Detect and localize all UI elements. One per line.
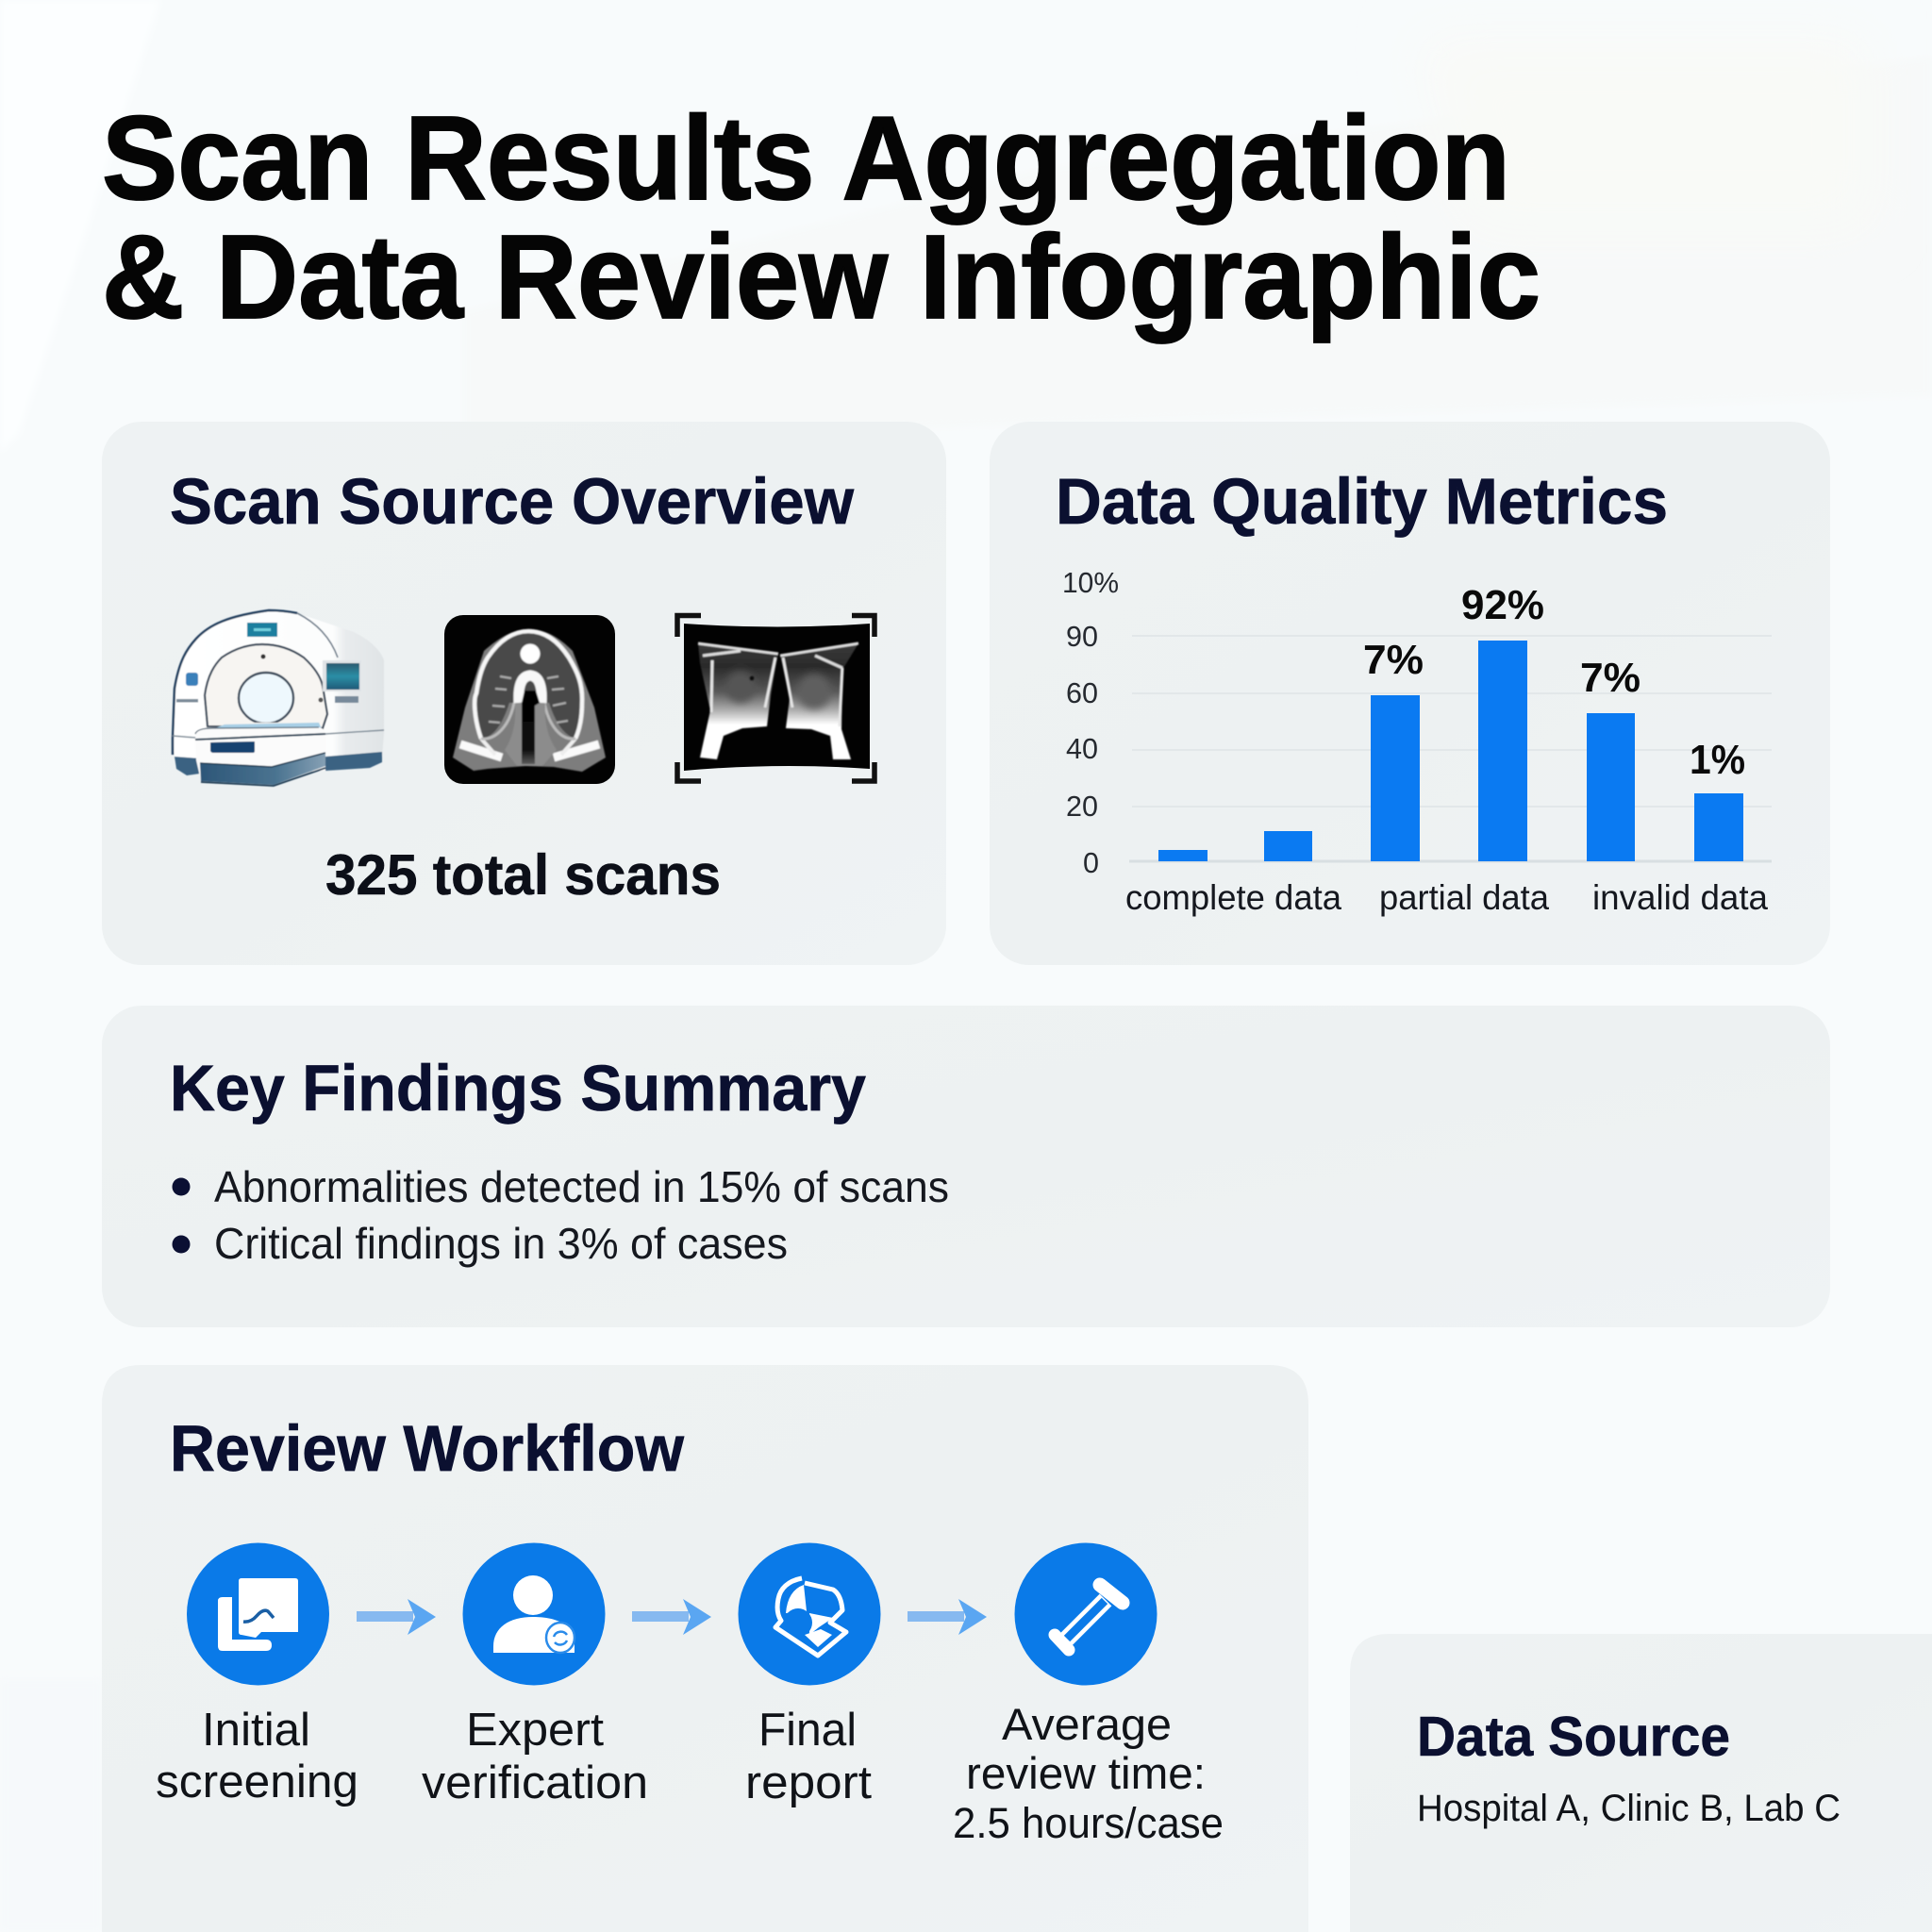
heading: scan source overview: Scan Source Overview xyxy=(170,465,854,538)
icon: CT scanner xyxy=(173,610,384,786)
label: final report: Final xyxy=(758,1705,857,1756)
bar chart: 40 xyxy=(1066,732,1098,765)
arrow 1 xyxy=(357,1599,436,1635)
label: average review time: 2.5 hours/case xyxy=(953,1799,1224,1847)
title xyxy=(102,92,1541,343)
label: expert verification: Expert xyxy=(466,1705,604,1756)
bar chart: 20 xyxy=(1066,790,1098,823)
label: initial screening xyxy=(156,1705,358,1807)
panel: data quality metrics xyxy=(990,422,1830,965)
label: final report xyxy=(745,1705,872,1808)
bar chart: 60 xyxy=(1066,676,1098,709)
bar chart: 7% xyxy=(1363,637,1424,683)
bar chart: 10% xyxy=(1062,566,1119,599)
bar chart: 0 xyxy=(1083,846,1099,879)
step: final report xyxy=(738,1543,881,1808)
step: initial screening xyxy=(156,1543,358,1807)
bar chart: 92% xyxy=(1461,582,1544,628)
bar chart xyxy=(1062,566,1772,917)
arrow 3 xyxy=(908,1599,987,1635)
arrow 2 xyxy=(632,1599,711,1635)
label: average review time: review time: xyxy=(966,1748,1206,1798)
label: average review time xyxy=(953,1699,1224,1847)
bar chart: 1% xyxy=(1690,737,1745,783)
panel: key findings summary xyxy=(102,1006,1830,1327)
panel: scan source overview xyxy=(102,422,946,965)
panel: review workflow xyxy=(102,1365,1308,1932)
label: final report: report xyxy=(745,1757,872,1808)
bar chart: partial data xyxy=(1379,878,1549,917)
title: Scan Results Aggregation xyxy=(102,92,1510,225)
panel: data source xyxy=(1350,1634,1932,1932)
heading: data quality metrics: Data Quality Metrics xyxy=(1056,465,1668,538)
bar chart: 7% xyxy=(1580,655,1641,701)
step: average review time xyxy=(953,1543,1224,1847)
bar chart: 90 xyxy=(1066,620,1098,653)
icon: chest X-ray with corner brackets xyxy=(677,615,874,781)
title: & Data Review Infographic xyxy=(102,210,1541,343)
heading: data source: Data Source xyxy=(1417,1706,1730,1768)
icon: CT slice scan xyxy=(444,615,615,784)
bullet: critical findings: Critical findings in 3% of cases xyxy=(214,1219,788,1268)
label: initial screening: screening xyxy=(156,1757,358,1807)
text: source list: Hospital A, Clinic B, Lab C xyxy=(1417,1788,1840,1829)
bar chart: invalid data xyxy=(1592,878,1768,917)
step: expert verification xyxy=(422,1543,648,1808)
heading: review workflow: Review Workflow xyxy=(170,1412,684,1485)
label: expert verification: verification xyxy=(422,1757,648,1808)
label: initial screening: Initial xyxy=(202,1705,310,1756)
heading: key findings summary: Key Findings Summary xyxy=(170,1052,866,1124)
stat: total scans: 325 total scans xyxy=(325,843,721,907)
bullet: abnormalities: Abnormalities detected in 15% of scans xyxy=(214,1162,949,1211)
label: average review time: Average xyxy=(1002,1699,1172,1749)
label: expert verification xyxy=(422,1705,648,1808)
bar chart: complete data xyxy=(1125,878,1341,917)
